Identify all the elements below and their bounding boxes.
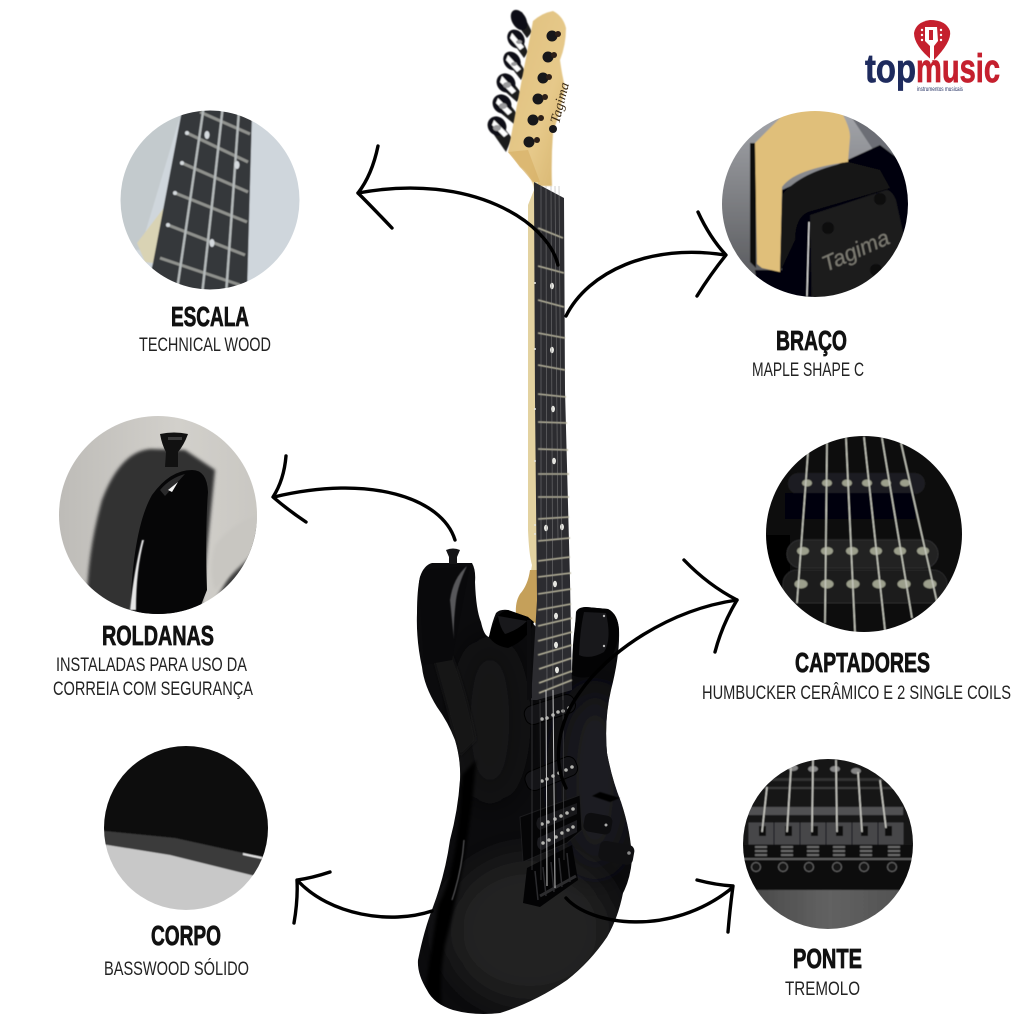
photo circle: corpo xyxy=(104,746,268,910)
heading: escala: TECHNICAL WOOD xyxy=(139,335,271,356)
heading: roldanas: INSTALADAS PARA USO DA xyxy=(56,655,247,676)
heading: escala: ESCALA xyxy=(171,301,249,332)
photo circle: ponte xyxy=(743,759,913,929)
guitar pickups xyxy=(520,692,582,862)
guitar fretboard xyxy=(527,182,572,700)
heading: roldanas: CORREIA COM SEGURANÇA xyxy=(53,679,253,700)
heading: ponte xyxy=(785,943,862,1000)
guitar strings xyxy=(532,186,564,888)
neck single coil xyxy=(522,692,578,727)
heading: ponte: PONTE xyxy=(793,943,862,974)
middle single coil xyxy=(523,754,580,793)
logo pick icon xyxy=(914,20,950,61)
guitar knobs xyxy=(582,812,635,866)
heading: corpo: CORPO xyxy=(151,920,221,951)
logo: topmusic: top xyxy=(865,47,916,91)
photo circle: braco: Tagima xyxy=(818,225,893,277)
heading: ponte: TREMOLO xyxy=(785,979,860,1000)
guitar bridge xyxy=(523,845,578,907)
headstock brand: Tagima xyxy=(548,81,573,125)
heading: corpo: BASSWOOD SÓLIDO xyxy=(104,958,249,980)
heading: roldanas: ROLDANAS xyxy=(102,620,214,651)
strap button xyxy=(446,548,460,564)
heading: captadores: CAPTADORES xyxy=(795,647,930,678)
guitar horn cut-outs xyxy=(489,610,534,648)
heading: braco: BRAÇO xyxy=(776,325,847,356)
photo circle: braco xyxy=(722,111,908,297)
guitar neck xyxy=(516,182,538,625)
heading: captadores xyxy=(702,647,1011,704)
photo circle: escala xyxy=(120,110,300,290)
heading: braco: MAPLE SHAPE C xyxy=(752,360,864,381)
guitar body xyxy=(417,548,632,1014)
arrow: corpo xyxy=(294,872,432,923)
logo: topmusic xyxy=(865,20,1000,93)
heading: escala xyxy=(139,301,271,356)
arrow: captadores xyxy=(558,560,737,788)
arrow: roldanas xyxy=(273,456,455,540)
guitar photo xyxy=(417,7,635,1014)
humbucker xyxy=(520,795,582,862)
photo circle: roldanas xyxy=(59,416,257,614)
arrow: ponte xyxy=(566,880,733,932)
guitar back tuners xyxy=(484,7,532,152)
guitar headstock xyxy=(508,11,573,186)
heading: braco xyxy=(752,325,864,381)
heading: roldanas xyxy=(53,620,253,700)
photo circle: captadores xyxy=(766,436,962,632)
decal xyxy=(592,792,620,802)
logo: topmusic: instrumentos musicais xyxy=(917,87,963,93)
arrow: braco xyxy=(566,212,726,316)
heading: corpo xyxy=(104,920,249,980)
arrow: escala xyxy=(358,146,558,265)
guitar heel xyxy=(516,570,538,624)
